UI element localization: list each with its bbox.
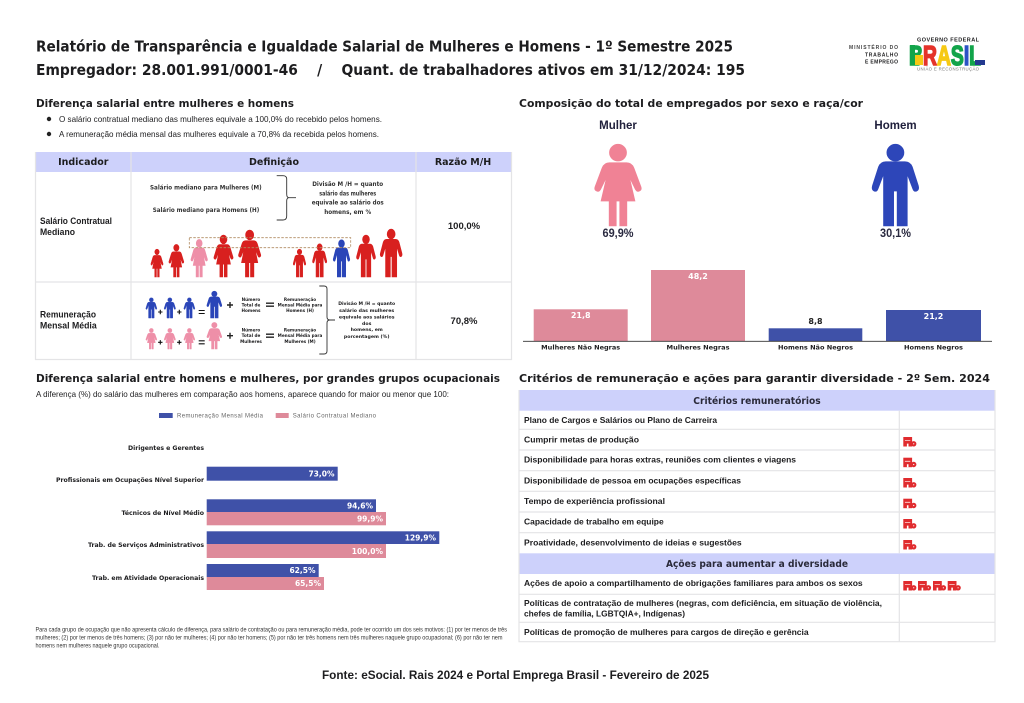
bar chart: sexo e raça/cor: 8,8 bbox=[808, 317, 823, 326]
row label: remuneração mensal média bbox=[40, 310, 98, 330]
definition: remuneração média: Mensal Média para bbox=[278, 333, 322, 338]
bar chart: grupos ocupacionais: 65,5% bbox=[295, 579, 321, 588]
action rows: Ações de apoio a compartilhamento de obrigações familiares para ambos os sexos bbox=[524, 579, 863, 588]
logo: ministério and governo federal: BRASIL bbox=[909, 40, 981, 71]
bar chart: grupos ocupacionais: 100,0% bbox=[352, 547, 383, 556]
icon: mulher 69,9%: 69,9% bbox=[602, 226, 634, 240]
icons: mulheres em fila bbox=[151, 230, 261, 277]
definition: remuneração média: Divisão M /H = quanto bbox=[338, 301, 396, 307]
criteria rows: Capacidade de trabalho em equipe bbox=[524, 518, 664, 527]
definition: salário mediano: equivale ao salário dos bbox=[312, 200, 384, 207]
logo: ministério and governo federal: MINISTÉRIO DO bbox=[849, 43, 898, 51]
icons: homens em fila bbox=[293, 229, 402, 277]
bar chart: sexo e raça/cor: Homens Negros bbox=[904, 344, 963, 352]
action rows: Políticas de contratação de mulheres (negras, com deficiência, em situação de violência, bbox=[524, 599, 882, 608]
criteria rows bbox=[524, 416, 796, 548]
title: Relatório de Transparência e Igualdade Salarial de Mulheres e Homens - 1º Semestre 2025 bbox=[36, 38, 733, 56]
bar chart: grupos ocupacionais bbox=[56, 445, 439, 590]
legend: Salário Contratual Mediano bbox=[293, 414, 377, 420]
title bbox=[36, 38, 745, 79]
bar chart: grupos ocupacionais: 99,9% bbox=[357, 514, 383, 524]
subtitle: A diferença (%) do salário das mulheres em comparação aos homens, aparece quando for maior ou menor que 100: bbox=[36, 389, 449, 399]
icon: homem 30,1%: Homem bbox=[874, 120, 917, 132]
values: razão M/H: 70,8% bbox=[451, 316, 478, 327]
bar chart: sexo e raça/cor: 48,2 bbox=[688, 272, 708, 281]
panel: diferença salarial entre mulheres e homens bbox=[36, 97, 512, 360]
heading: grupos ocupacionais: Diferença salarial entre homens e mulheres, por grandes grupos ocupacionais bbox=[36, 372, 500, 385]
definition: salário mediano: Divisão M /H = quanto bbox=[312, 181, 383, 188]
footnote: mulheres; (2) por ter menos de três homens; (3) por não ter mulheres; (4) por não ter homens; (5) por não ter três homens nem três mulheres naquele grupo ocupacional; (6) por não ter nem bbox=[36, 634, 502, 642]
definition: remuneração média bbox=[146, 286, 396, 354]
logo: ministério and governo federal: UNIÃO E RECONSTRUÇÃO bbox=[917, 67, 980, 72]
heading: critérios: Critérios de remuneração e ações para garantir diversidade - 2º Sem. 2024 bbox=[519, 372, 990, 385]
definition: salário mediano bbox=[150, 176, 384, 220]
footnote bbox=[36, 627, 507, 649]
bar chart: sexo e raça/cor: Mulheres Negras bbox=[666, 344, 730, 352]
definition: remuneração média: Mensal Média para bbox=[278, 302, 322, 308]
bar chart: grupos ocupacionais: Trab. de Serviços Administrativos bbox=[88, 542, 204, 549]
icons: critérios adotados bbox=[903, 437, 916, 550]
bullet list bbox=[47, 114, 382, 139]
table: critérios remuneratórios bbox=[519, 390, 995, 642]
bar chart: sexo e raça/cor: 21,2 bbox=[924, 312, 943, 321]
criteria rows: Disponibilidade para horas extras, reuniões com clientes e viagens bbox=[524, 456, 796, 465]
icon: homem 30,1%: 30,1% bbox=[880, 226, 911, 240]
row label: remuneração mensal média: Mensal Média bbox=[40, 320, 98, 330]
values: razão M/H bbox=[448, 221, 481, 327]
table header bbox=[58, 157, 491, 168]
bar chart: grupos ocupacionais: Técnicos de Nível Médio bbox=[122, 509, 204, 517]
definition: remuneração média: homens, em bbox=[351, 327, 383, 333]
logo: ministério and governo federal: E EMPREGO bbox=[865, 60, 898, 66]
table: indicadores bbox=[36, 152, 512, 360]
row label: salário contratual mediano: Salário Contratual bbox=[40, 216, 112, 226]
bullet list: O salário contratual mediano das mulheres equivale a 100,0% do recebido pelos homens. bbox=[59, 114, 382, 124]
definition: remuneração média: Número bbox=[242, 328, 260, 332]
bar chart: grupos ocupacionais: 129,9% bbox=[405, 534, 436, 542]
icon: homem 30,1% bbox=[872, 120, 918, 240]
criteria rows: Plano de Cargos e Salários ou Plano de Carreira bbox=[524, 416, 717, 425]
bar chart: sexo e raça/cor: Homens Não Negros bbox=[778, 344, 853, 352]
legend: Remuneração Mensal Média bbox=[177, 414, 264, 420]
definition: remuneração média: Mulheres (M) bbox=[284, 339, 316, 344]
table header: Razão M/H bbox=[435, 157, 491, 168]
logo: ministério and governo federal bbox=[849, 38, 985, 72]
icon: mulher 69,9%: Mulher bbox=[599, 120, 637, 132]
bar chart: grupos ocupacionais: Trab. em Atividade Operacionais bbox=[92, 575, 204, 582]
definition: remuneração média: Homens bbox=[241, 308, 261, 313]
panel: critérios de remuneração e ações bbox=[519, 372, 995, 642]
action rows: chefes de família, LGBTQIA+, Indígenas) bbox=[524, 610, 685, 619]
footnote: Para cada grupo de ocupação que não apresenta cálculo de diferença, para salário de contratação ou para remuneração média, pode ter ocorrido um dos seis motivos: (1) por ter menos de três bbox=[36, 627, 507, 634]
definition: remuneração média: Número bbox=[242, 297, 260, 302]
criteria rows: Tempo de experiência profissional bbox=[524, 497, 665, 506]
legend bbox=[159, 413, 377, 420]
definition: salário mediano: Salário mediano para Mulheres (M) bbox=[150, 184, 262, 191]
logo: ministério and governo federal: TRABALHO bbox=[865, 52, 898, 58]
values: razão M/H: 100,0% bbox=[448, 221, 481, 232]
icon: mulher 69,9% bbox=[595, 120, 641, 240]
definition: salário mediano: Salário mediano para Homens (H) bbox=[153, 207, 260, 214]
title: Empregador: 28.001.991/0001-46 / Quant. de trabalhadores ativos em 31/12/2024: 195 bbox=[36, 61, 745, 79]
definition: remuneração média: equivale aos salários bbox=[339, 314, 395, 320]
footnote: homens nem mulheres naquele grupo ocupacional. bbox=[36, 642, 160, 649]
action rows bbox=[524, 579, 882, 637]
table header: ações para aumentar a diversidade: Ações para aumentar a diversidade bbox=[666, 559, 848, 570]
bar chart: grupos ocupacionais: Profissionais em Ocupações Nível Superior bbox=[56, 476, 205, 484]
criteria rows: Disponibilidade de pessoa em ocupações específicas bbox=[524, 476, 741, 485]
definition: remuneração média: Mulheres bbox=[240, 339, 262, 344]
source: Fonte: eSocial. Rais 2024 e Portal Emprega Brasil - Fevereiro de 2025 bbox=[322, 668, 709, 682]
panel: composição do total de empregados bbox=[519, 97, 992, 352]
action rows: Políticas de promoção de mulheres para cargos de direção e gerência bbox=[524, 628, 809, 637]
bar chart: sexo e raça/cor bbox=[523, 270, 992, 352]
definition: salário mediano: salário das mulheres bbox=[319, 190, 377, 197]
row label: salário contratual mediano: Mediano bbox=[40, 227, 75, 237]
table header: Indicador bbox=[58, 157, 109, 168]
definition: remuneração média: porcentagem (%) bbox=[344, 334, 390, 340]
definition: remuneração média: Remuneração bbox=[284, 297, 316, 302]
definition: remuneração média: dos bbox=[362, 321, 372, 327]
bar chart: grupos ocupacionais: 73,0% bbox=[308, 470, 335, 478]
definition: remuneração média: Remuneração bbox=[284, 328, 316, 332]
heading: composição: Composição do total de empregados por sexo e raça/cor bbox=[519, 97, 864, 110]
bullet list: A remuneração média mensal das mulheres equivale a 70,8% da recebida pelos homens. bbox=[59, 129, 379, 139]
definition: salário mediano: homens, em % bbox=[324, 209, 371, 216]
heading: diferença salarial: Diferença salarial entre mulheres e homens bbox=[36, 97, 294, 110]
criteria rows: Proatividade, desenvolvimento de ideias e sugestões bbox=[524, 539, 742, 548]
bar chart: grupos ocupacionais: 94,6% bbox=[347, 502, 373, 510]
definition: remuneração média: Total de bbox=[242, 333, 261, 338]
table header: critérios remuneratórios: Critérios remuneratórios bbox=[693, 396, 821, 407]
table header: Definição bbox=[249, 157, 299, 168]
definition: remuneração média: salário das mulheres bbox=[339, 307, 394, 314]
row label: salário contratual mediano bbox=[40, 216, 112, 237]
icons: ações adotadas bbox=[903, 581, 961, 590]
panel: diferença salarial por grupos ocupacionais bbox=[36, 372, 507, 649]
bar chart: sexo e raça/cor: Mulheres Não Negras bbox=[541, 344, 620, 352]
criteria rows: Cumprir metas de produção bbox=[524, 436, 639, 445]
row label: remuneração mensal média: Remuneração bbox=[40, 310, 96, 320]
bar chart: sexo e raça/cor: 21,8 bbox=[571, 311, 591, 320]
bar chart: grupos ocupacionais: Dirigentes e Gerentes bbox=[128, 445, 204, 452]
definition: remuneração média: Total de bbox=[242, 302, 261, 308]
definition: remuneração média: Homens (H) bbox=[286, 308, 314, 313]
bar chart: grupos ocupacionais: 62,5% bbox=[289, 566, 316, 575]
logo: ministério and governo federal: GOVERNO FEDERAL bbox=[917, 38, 980, 44]
